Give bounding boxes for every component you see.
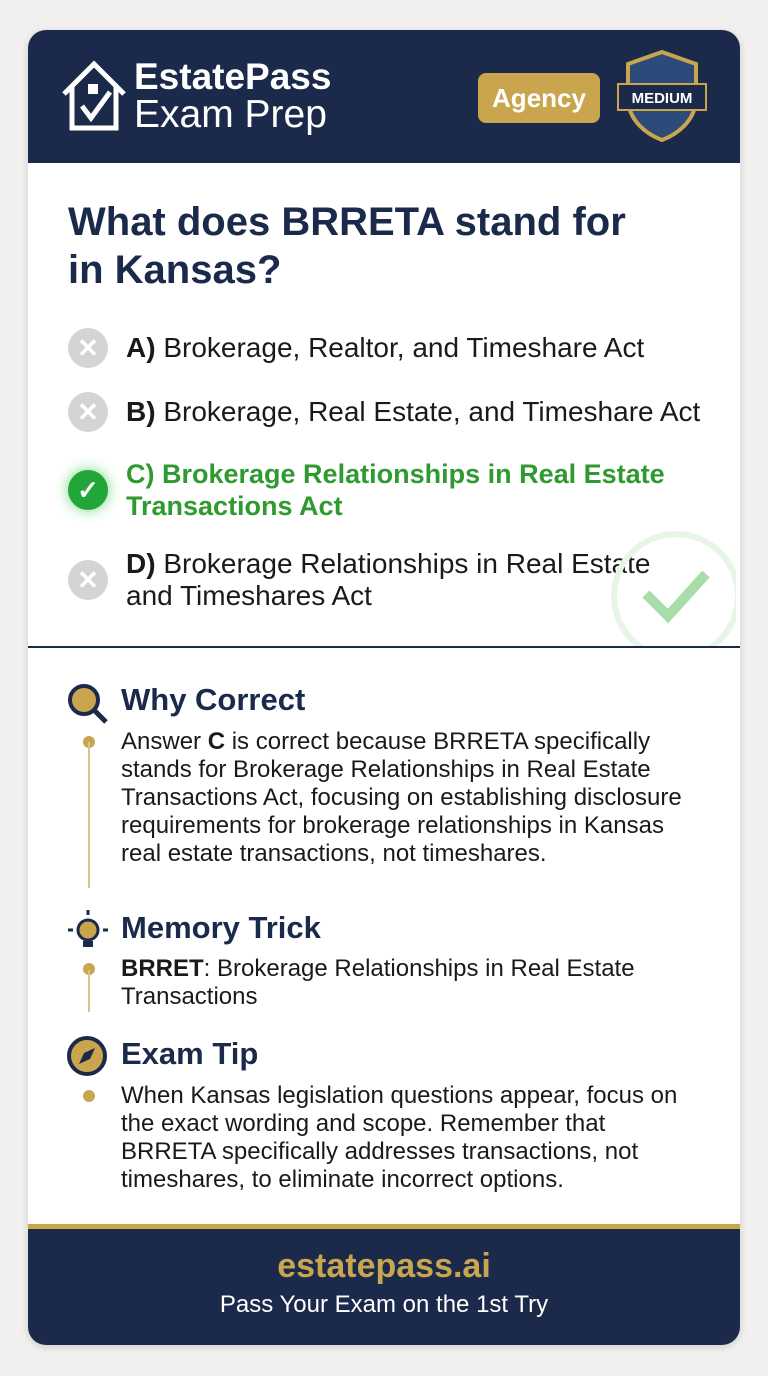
card: C) Brokerage Relationships in Real Estate (126, 459, 665, 489)
card: Why Correct (121, 682, 305, 717)
logo icon: house (62, 60, 126, 130)
card: BRRET: Brokerage Relationships in Real Estate Transactions (121, 955, 635, 1010)
icon: compass (67, 1036, 107, 1076)
badge: medium shield (617, 50, 707, 142)
card: Transactions Act (126, 491, 343, 521)
card: D) Brokerage Relationships in Real Estate (126, 548, 650, 579)
option D (68, 548, 650, 611)
badge: medium shield: MEDIUM (632, 90, 692, 107)
card: Exam Tip (121, 1036, 258, 1071)
card: and Timeshares Act (126, 580, 372, 611)
badge: Agency (478, 73, 600, 123)
exam tip (67, 1036, 677, 1193)
logo text (134, 56, 331, 136)
memory trick (68, 910, 635, 1012)
card: A) Brokerage, Realtor, and Timeshare Act (126, 332, 644, 363)
card: ✕ (77, 565, 99, 595)
footer (28, 1224, 740, 1345)
logo text: EstatePass (134, 56, 331, 97)
icon: bulb (68, 910, 108, 947)
card: B) Brokerage, Real Estate, and Timeshare Act (126, 396, 700, 427)
card: ✕ (77, 333, 99, 363)
watermark check (611, 531, 736, 646)
why correct (68, 682, 682, 888)
logo text: Exam Prep (134, 93, 327, 136)
card: When Kansas legislation questions appear, focus on the exact wording and scope. Remember that BRRETA specifically addresses transactions, not timeshares, to eliminate incorrect options. (121, 1082, 677, 1193)
option C correct (58, 459, 665, 521)
option B (68, 392, 700, 432)
question title: What does BRRETA stand for (68, 200, 626, 244)
header (28, 30, 740, 163)
footer: Pass Your Exam on the 1st Try (220, 1291, 548, 1318)
question title: in Kansas? (68, 248, 281, 292)
card: Memory Trick (121, 910, 321, 945)
footer: estatepass.ai (277, 1247, 491, 1285)
card: Answer C is correct because BRRETA specifically stands for Brokerage Relationships in Real Estate Transactions Act, focusing on establishing disclosure requirements for brokerage relationships in Kansas real estate transactions, not timeshares. (121, 728, 682, 867)
badge: Agency: Agency (492, 83, 586, 113)
icon: magnifier (68, 684, 108, 724)
card: ✕ (77, 397, 99, 427)
question title (68, 200, 626, 292)
card: ✓ (77, 475, 99, 505)
option A (68, 328, 644, 368)
